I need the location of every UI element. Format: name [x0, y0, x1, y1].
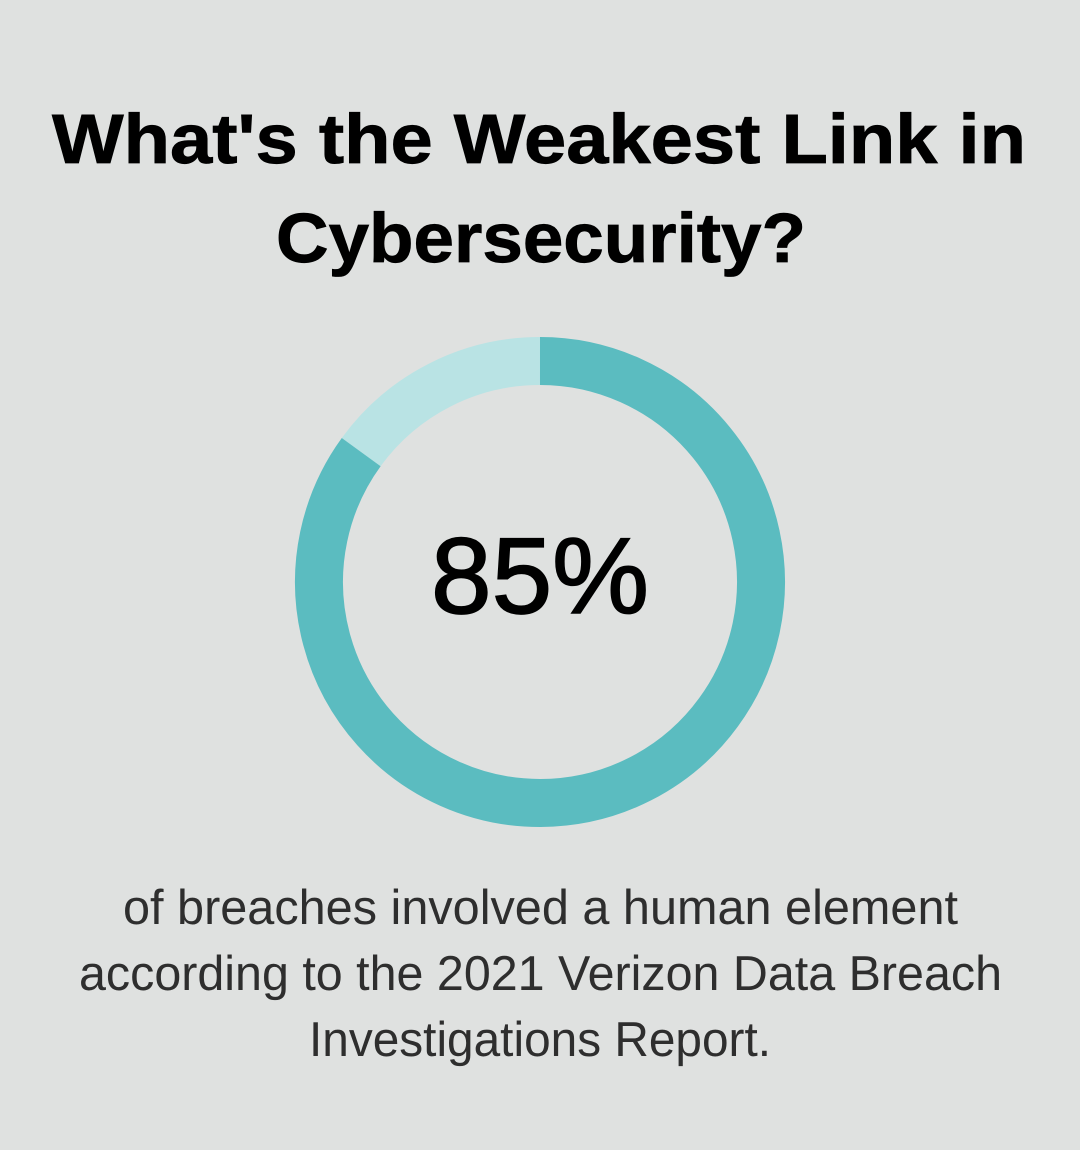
caption	[79, 881, 1002, 1067]
donut chart: 85%	[319, 361, 761, 803]
caption: according to the 2021 Verizon Data Breach	[79, 947, 1002, 1001]
big number: 85%	[431, 515, 649, 636]
85% segment	[319, 361, 761, 803]
title	[52, 100, 1026, 277]
caption: of breaches involved a human element	[123, 881, 958, 935]
title: Cybersecurity?	[276, 199, 806, 277]
title: What's the Weakest Link in	[52, 100, 1026, 178]
remaining 15% segment	[361, 361, 540, 452]
caption: Investigations Report.	[309, 1013, 771, 1067]
